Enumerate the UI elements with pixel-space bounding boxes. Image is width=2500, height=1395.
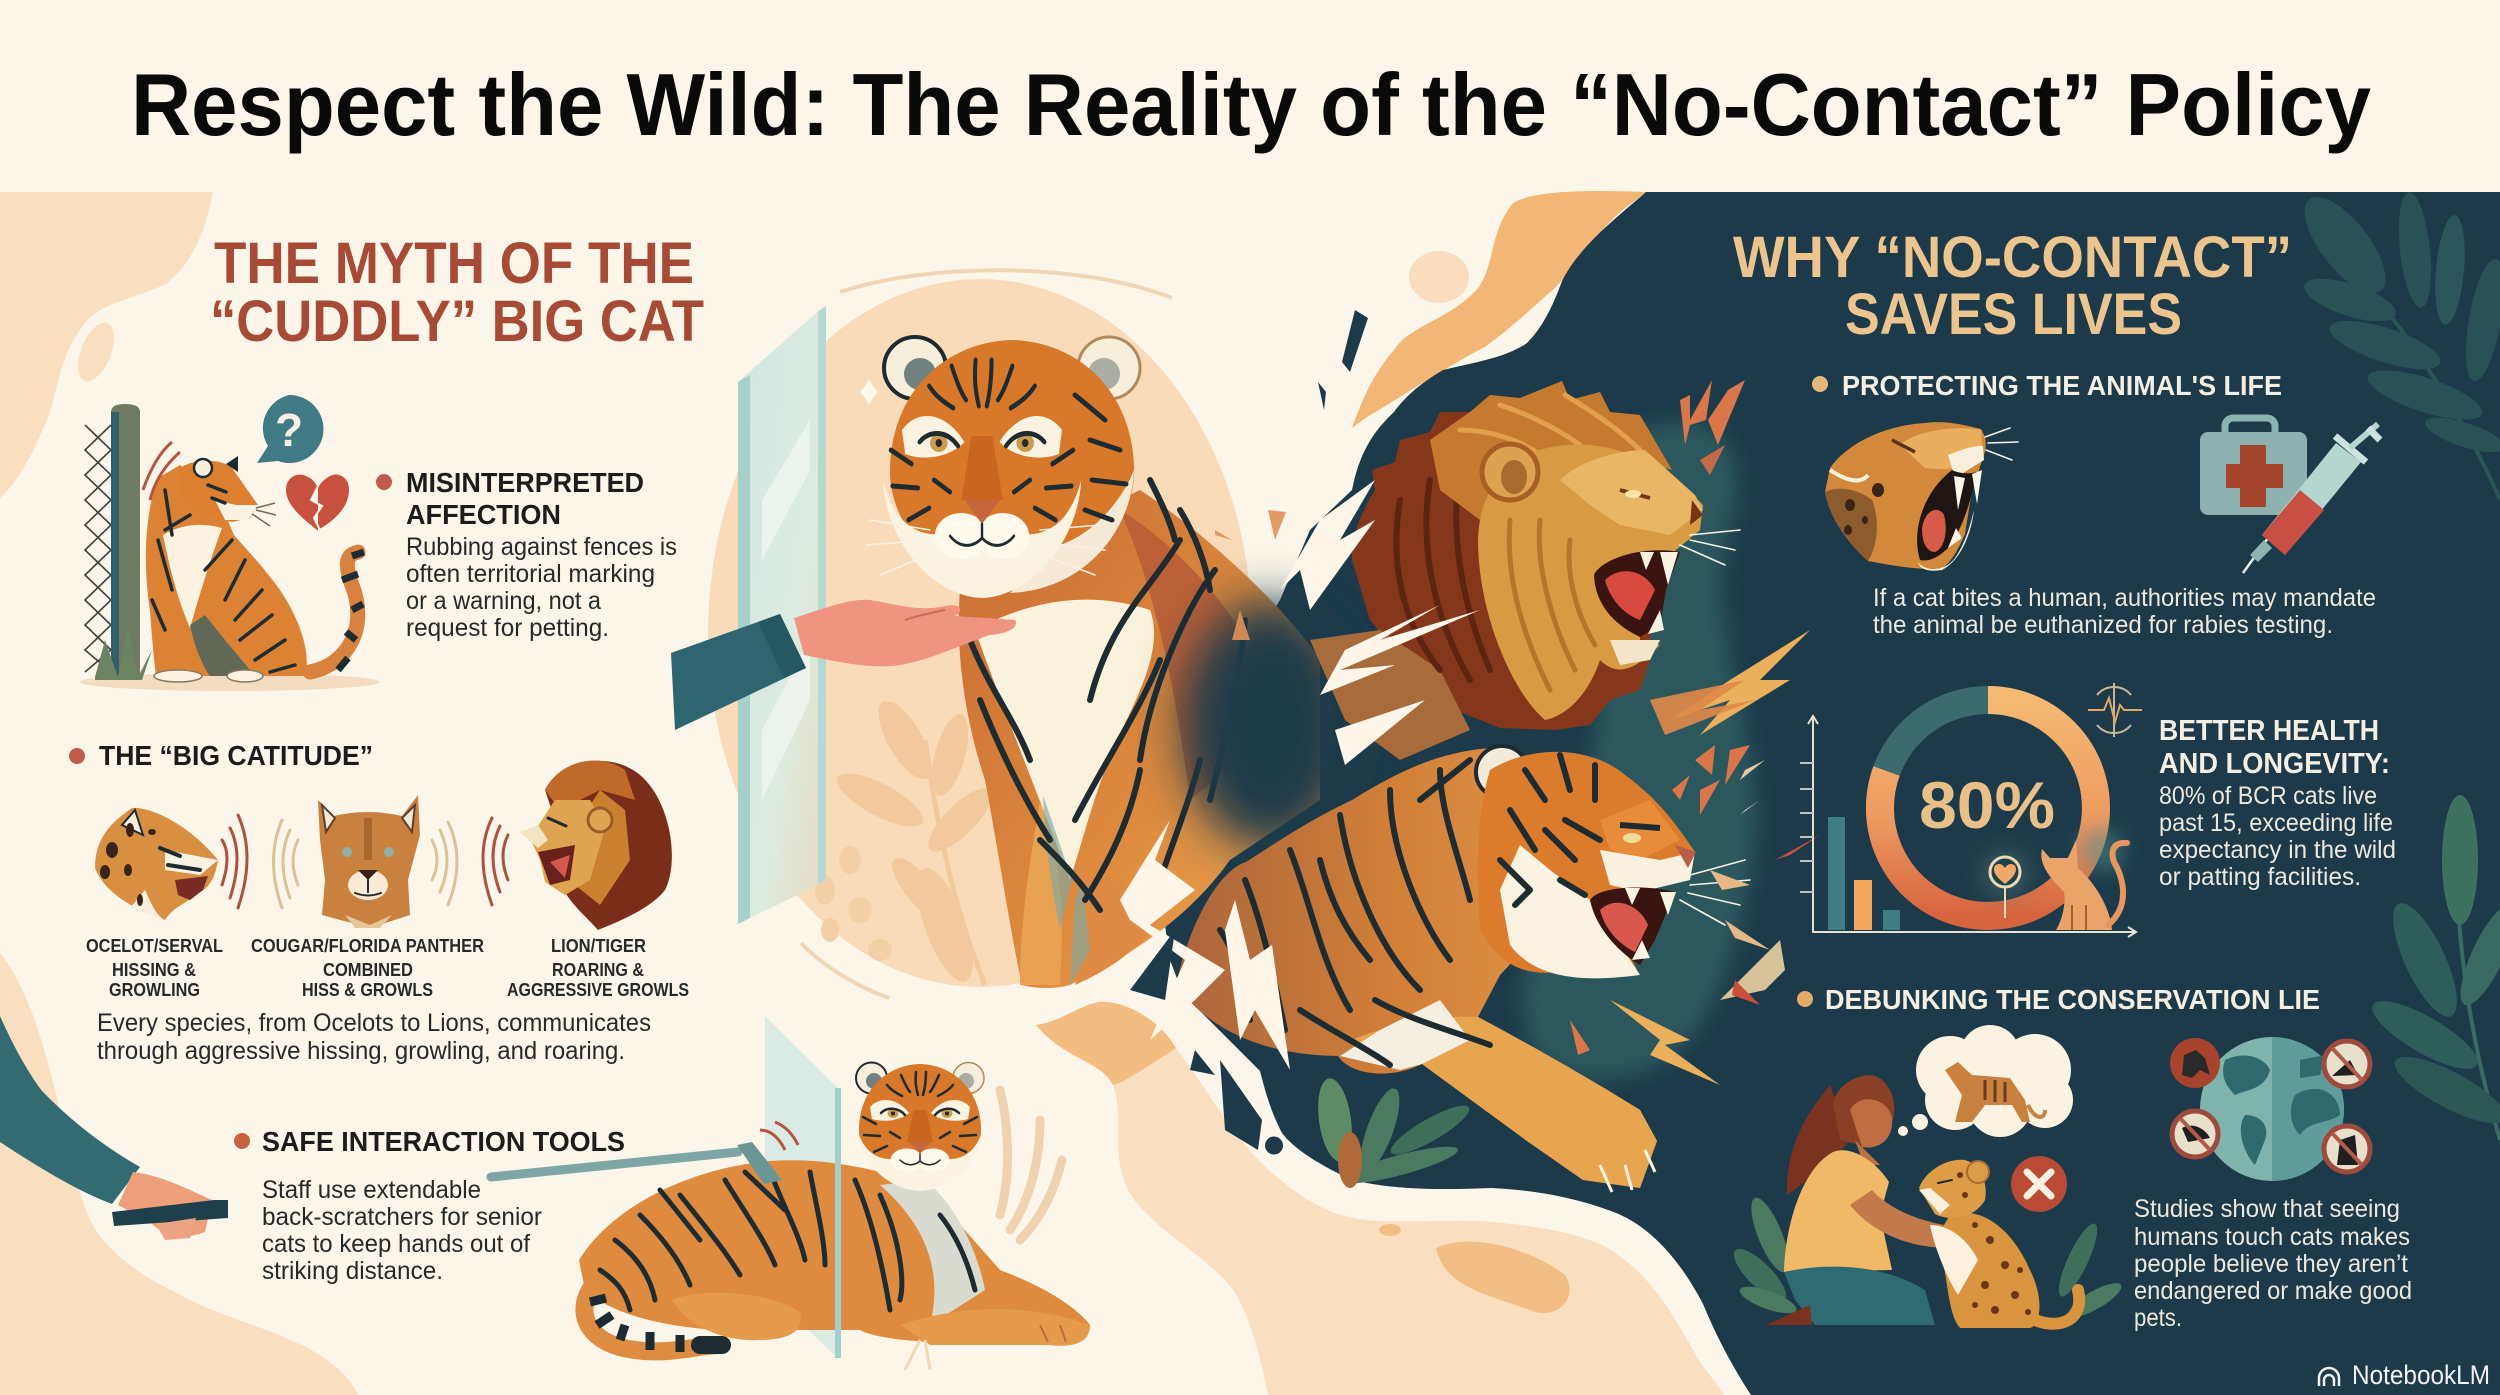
background blob: top left (0, 192, 213, 498)
section: misinterpreted affection: Rubbing against fences is (406, 533, 677, 561)
species labels: HISSING & (112, 960, 196, 980)
species labels: LION/TIGER (551, 936, 646, 956)
icon: leopard cub (1919, 1160, 2125, 1328)
icon: cougar head (318, 795, 420, 928)
chart: bars and axes (1800, 716, 2136, 937)
section: debunking the conservation lie: DEBUNKING THE CONSERVATION LIE (1825, 984, 2320, 1015)
section: debunking the conservation lie: pets. (2134, 1304, 2182, 1332)
section: better health: AND LONGEVITY: (2159, 748, 2390, 780)
heading: why no-contact (1733, 225, 2292, 347)
dark panel: why no-contact (1160, 192, 2500, 1395)
orange shards (1215, 510, 1286, 640)
glass panel: calm tiger (738, 306, 826, 924)
section: safe interaction tools: Staff use extendable (262, 1176, 481, 1204)
icon: red x badge (2011, 1156, 2067, 1212)
section: better health: or patting facilities. (2159, 863, 2361, 891)
section: big catitude: THE “BIG CATITUDE” (99, 740, 373, 771)
back scratcher pole (491, 1122, 798, 1184)
section: safe interaction tools: SAFE INTERACTION TOOLS (262, 1126, 625, 1157)
section: misinterpreted affection: AFFECTION (406, 499, 561, 530)
species labels: GROWLING (109, 980, 200, 1000)
icon: globe with prohibition badges (2170, 1037, 2370, 1181)
species labels: ROARING & (552, 960, 644, 980)
decorative leaves: top right (2290, 185, 2500, 500)
tiger lunging (1176, 746, 1750, 1192)
section: debunking the conservation lie: Studies show that seeing (2134, 1195, 2400, 1223)
reaching arm and hand (671, 600, 1016, 730)
section: better health: past 15, exceeding life (2159, 809, 2393, 837)
icon: snarling cheetah (1825, 422, 2018, 571)
species labels: COMBINED (323, 960, 413, 980)
heading: myth (210, 231, 704, 354)
section: safe interaction tools: cats to keep hands out of (262, 1230, 530, 1258)
dark shards (1130, 310, 1400, 1154)
section: misinterpreted affection: or a warning, not a (406, 587, 601, 615)
text: every species (97, 1009, 651, 1065)
orange wave (1352, 191, 1646, 428)
section: protecting the animal's life: If a cat bites a human, authorities may mandate (1873, 584, 2376, 612)
decorative leaves: bottom right (2364, 795, 2500, 1140)
species labels: OCELOT/SERVAL (86, 936, 223, 956)
section: better health: expectancy in the wild (2159, 836, 2396, 864)
section: debunking the conservation lie: humans touch cats makes (2134, 1223, 2410, 1251)
glass panel: lying tiger back (765, 1016, 838, 1358)
section: safe interaction tools (234, 1126, 625, 1285)
background blob: bottom left (0, 953, 358, 1395)
icon: cat silhouette (2041, 828, 2127, 930)
section: debunking the conservation lie (1797, 984, 2412, 1332)
icon: question bubble (257, 395, 323, 463)
calm tiger (866, 337, 1320, 988)
section: misinterpreted affection: often territorial marking (406, 560, 655, 588)
icon: syringe (2243, 424, 2380, 573)
icon: person petting cub (1727, 1075, 1969, 1325)
species labels (86, 936, 689, 1000)
icon: medical kit (2200, 418, 2307, 515)
species labels: HISS & GROWLS (302, 980, 433, 1000)
jungle foliage under tiger (1313, 1076, 1474, 1190)
section: misinterpreted affection: MISINTERPRETED (406, 467, 644, 498)
section: debunking the conservation lie: people believe they aren’t (2134, 1250, 2408, 1278)
donut chart: 80 percent: 80% (1919, 768, 2055, 842)
lion roaring (1310, 381, 1740, 760)
section: safe interaction tools: striking distance. (262, 1257, 443, 1285)
icon: ocelot head (95, 808, 218, 920)
icon: broken heart (285, 474, 350, 532)
heading: myth: THE MYTH OF THE (214, 231, 694, 296)
cracks and shards (1120, 480, 1480, 1070)
icon: tiger rubbing fence (80, 404, 380, 691)
section: better health: 80% of BCR cats live (2159, 782, 2377, 810)
icon: glowing heart pin (1979, 848, 2031, 918)
section: protecting the animal's life: the animal be euthanized for rabies testing. (1873, 611, 2333, 639)
icon: sound waves (222, 815, 508, 908)
section: protecting the animal's life: PROTECTING THE ANIMAL'S LIFE (1842, 370, 2282, 401)
section: debunking the conservation lie: endangered or make good (2134, 1277, 2412, 1305)
dark blotch at tear (1182, 600, 1358, 850)
species labels: AGGRESSIVE GROWLS (507, 980, 689, 1000)
section: better health (2159, 715, 2396, 891)
heading: why no-contact: WHY “NO-CONTACT” (1733, 225, 2292, 290)
background blob: centre bottom (1036, 1002, 1724, 1395)
section: protecting the animal's life (1812, 370, 2376, 639)
title: Respect the Wild: The Reality of the “No-Contact” Policy (131, 55, 2371, 154)
orange lightning bolts (1570, 380, 1820, 1085)
text: every species: Every species, from Ocelots to Lions, communicates (97, 1009, 651, 1037)
text: every species: through aggressive hissing, growling, and roaring. (97, 1037, 625, 1065)
heading: myth: “CUDDLY” BIG CAT (210, 289, 704, 354)
section: misinterpreted affection: request for petting. (406, 614, 609, 642)
icon: question bubble: ? (275, 404, 303, 456)
icon: pulse target (2088, 683, 2142, 737)
peach circle behind calm tiger (708, 270, 1252, 998)
section: safe interaction tools: back-scratchers for senior (262, 1203, 542, 1231)
lying tiger (579, 1062, 1090, 1370)
section: better health: BETTER HEALTH (2159, 715, 2379, 747)
heading: why no-contact: SAVES LIVES (1845, 282, 2182, 347)
icon: lion head (520, 760, 672, 930)
icon: thought cloud with cat (1898, 1025, 2073, 1137)
icon: staff arm with back scratcher (0, 1016, 228, 1240)
section: misinterpreted affection (376, 467, 677, 642)
species labels: COUGAR/FLORIDA PANTHER (251, 936, 484, 956)
donut chart: 80 percent (1880, 700, 2096, 916)
